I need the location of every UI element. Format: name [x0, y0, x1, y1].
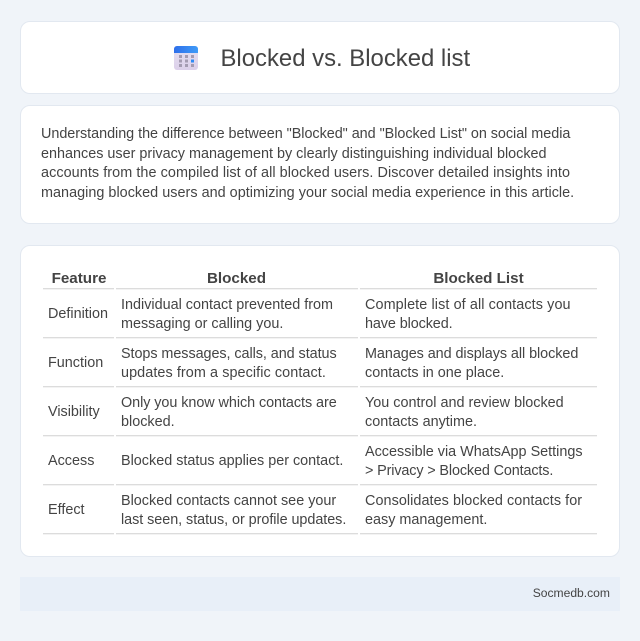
- table header: Blocked List: Blocked List: [433, 270, 524, 287]
- row: Visibility, Blocked List: You control and review blocked: [365, 395, 564, 411]
- panel: introduction: [20, 105, 620, 224]
- row: Access label: Access: [48, 453, 94, 469]
- row: Definition, Blocked: Individual contact prevented from: [121, 297, 333, 313]
- row: Effect label: Effect: [48, 502, 85, 518]
- row: Visibility, Blocked List: [365, 395, 564, 430]
- row: Definition, Blocked: messaging or calling you.: [121, 316, 283, 332]
- row: Effect, Blocked: last seen, status, or profile updates.: [121, 512, 346, 528]
- row: Visibility label: Visibility: [48, 404, 100, 420]
- footer: source: Socmedb.com: [533, 586, 610, 600]
- row: Function label: Function: [48, 355, 103, 371]
- row: Visibility, Blocked List: contacts anytime.: [365, 414, 477, 430]
- row: Function, Blocked: Stops messages, calls, and status: [121, 346, 337, 362]
- row: Definition, Blocked List: [365, 297, 571, 332]
- row: Effect, Blocked List: easy management.: [365, 512, 487, 528]
- intro text: accounts from the compiled list of all blocked users. Discover detailed insights into: [41, 165, 570, 181]
- footer bar: [20, 577, 620, 611]
- row: Definition, Blocked: [121, 297, 333, 332]
- row: Visibility, Blocked: [121, 395, 337, 430]
- row: Access, Blocked List: Accessible via WhatsApp Settings: [365, 444, 583, 460]
- row: Function, Blocked List: Manages and displays all blocked: [365, 346, 578, 362]
- row: Access, Blocked List: [365, 444, 583, 478]
- row: Function, Blocked List: [365, 346, 578, 380]
- panel: header: [20, 21, 620, 94]
- intro text: [41, 126, 574, 200]
- table header: Feature: Feature: [52, 270, 106, 287]
- row: Definition, Blocked List: Complete list of all contacts you: [365, 297, 571, 313]
- row: Effect, Blocked List: Consolidates blocked contacts for: [365, 493, 582, 509]
- row: Function, Blocked: [121, 346, 337, 380]
- icon: calendar: [174, 46, 198, 70]
- table header: Blocked: Blocked: [207, 270, 266, 287]
- row: Access, Blocked List: > Privacy > Blocked Contacts.: [365, 462, 553, 478]
- row: Definition, Blocked List: have blocked.: [365, 316, 453, 332]
- intro text: enhances user privacy management by clearly distinguishing individual blocked: [41, 146, 547, 162]
- row: Effect, Blocked List: [365, 493, 582, 528]
- title: Blocked vs. Blocked list: [220, 45, 470, 72]
- row: Effect, Blocked: [121, 493, 346, 528]
- row: Access, Blocked: Blocked status applies per contact.: [121, 453, 343, 469]
- row: Visibility, Blocked: Only you know which contacts are: [121, 395, 337, 411]
- row: Definition label: Definition: [48, 306, 108, 322]
- intro text: managing blocked users and optimizing your social media experience in this article.: [41, 184, 574, 200]
- row: Function, Blocked: updates from a specific contact.: [121, 364, 326, 380]
- row: Function, Blocked List: contacts in one place.: [365, 364, 504, 380]
- row: Effect, Blocked: Blocked contacts cannot see your: [121, 493, 336, 509]
- intro text: Understanding the difference between "Blocked" and "Blocked List" on social media: [41, 126, 570, 142]
- row: Visibility, Blocked: blocked.: [121, 414, 175, 430]
- panel: comparison table: [20, 245, 620, 557]
